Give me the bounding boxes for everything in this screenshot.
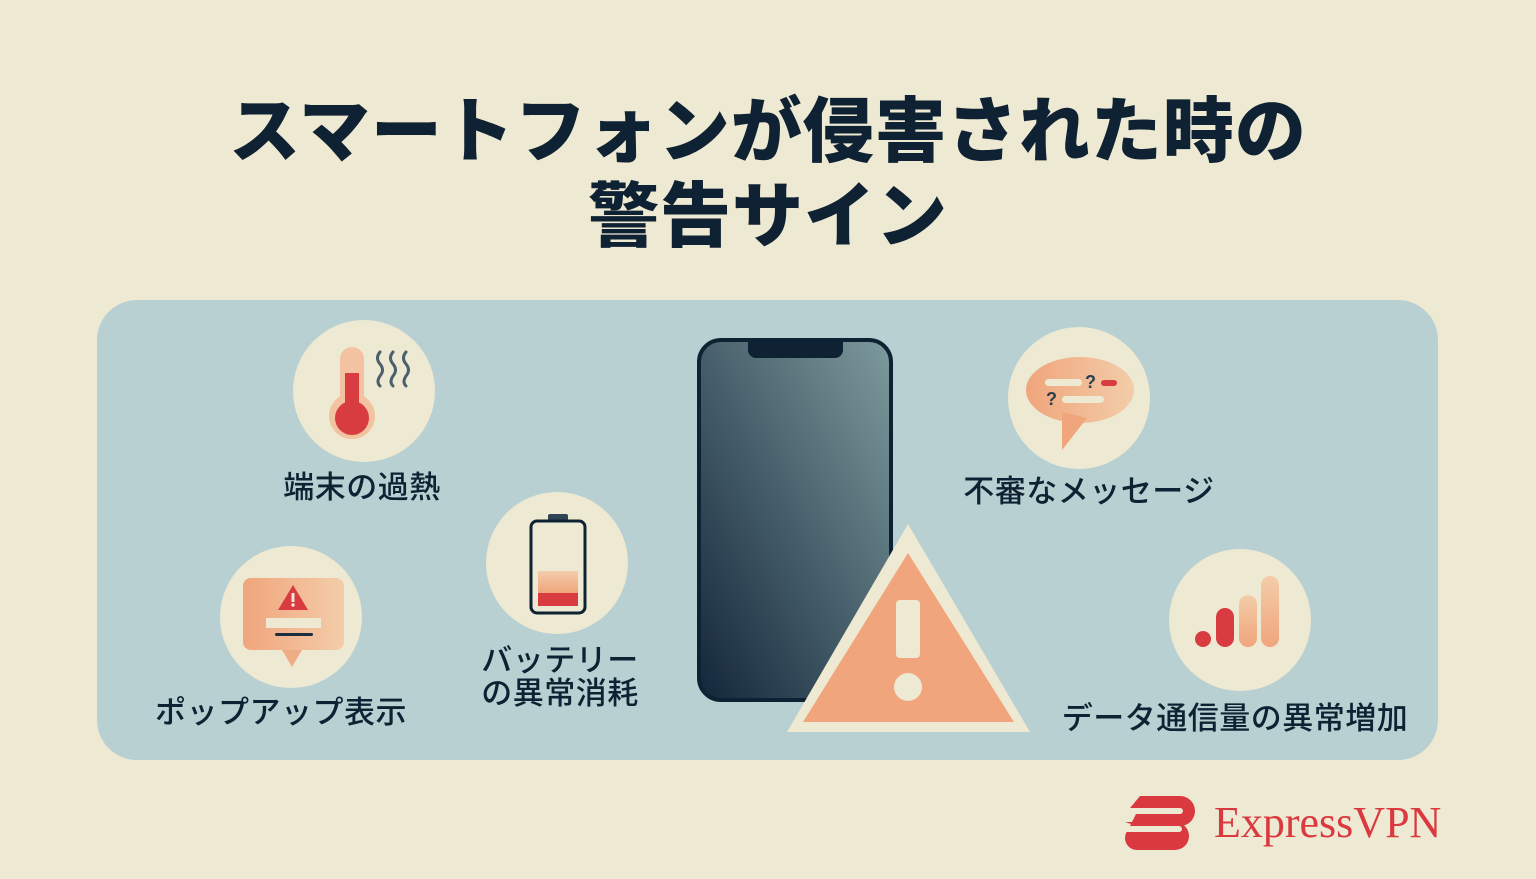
- icon: message: [1008, 327, 1150, 469]
- icon: popup: [220, 546, 362, 688]
- logo icon: [1117, 796, 1195, 850]
- label: popup: ポップアップ表示: [155, 695, 407, 730]
- label: overheating: 端末の過熱: [283, 470, 441, 505]
- icon: signal bars: [1169, 549, 1311, 691]
- phone: [699, 340, 891, 700]
- icon: warning triangle: [787, 524, 1030, 732]
- icon: message: ?: [1085, 372, 1096, 392]
- title: スマートフォンが侵害された時の: [229, 93, 1307, 172]
- title: 警告サイン: [588, 178, 948, 257]
- label: battery: [481, 643, 639, 711]
- title: [229, 93, 1307, 257]
- label: messages: 不審なメッセージ: [963, 474, 1215, 509]
- label: battery: バッテリー: [481, 643, 639, 678]
- logo text: ExpressVPN: [1214, 798, 1441, 847]
- label: battery: の異常消耗: [481, 676, 639, 711]
- icon: thermometer: [293, 320, 435, 462]
- icon: message: ?: [1046, 389, 1057, 409]
- label: data usage: データ通信量の異常増加: [1062, 701, 1408, 736]
- panel: main illustration: [97, 300, 1438, 760]
- icon: battery: [486, 492, 628, 634]
